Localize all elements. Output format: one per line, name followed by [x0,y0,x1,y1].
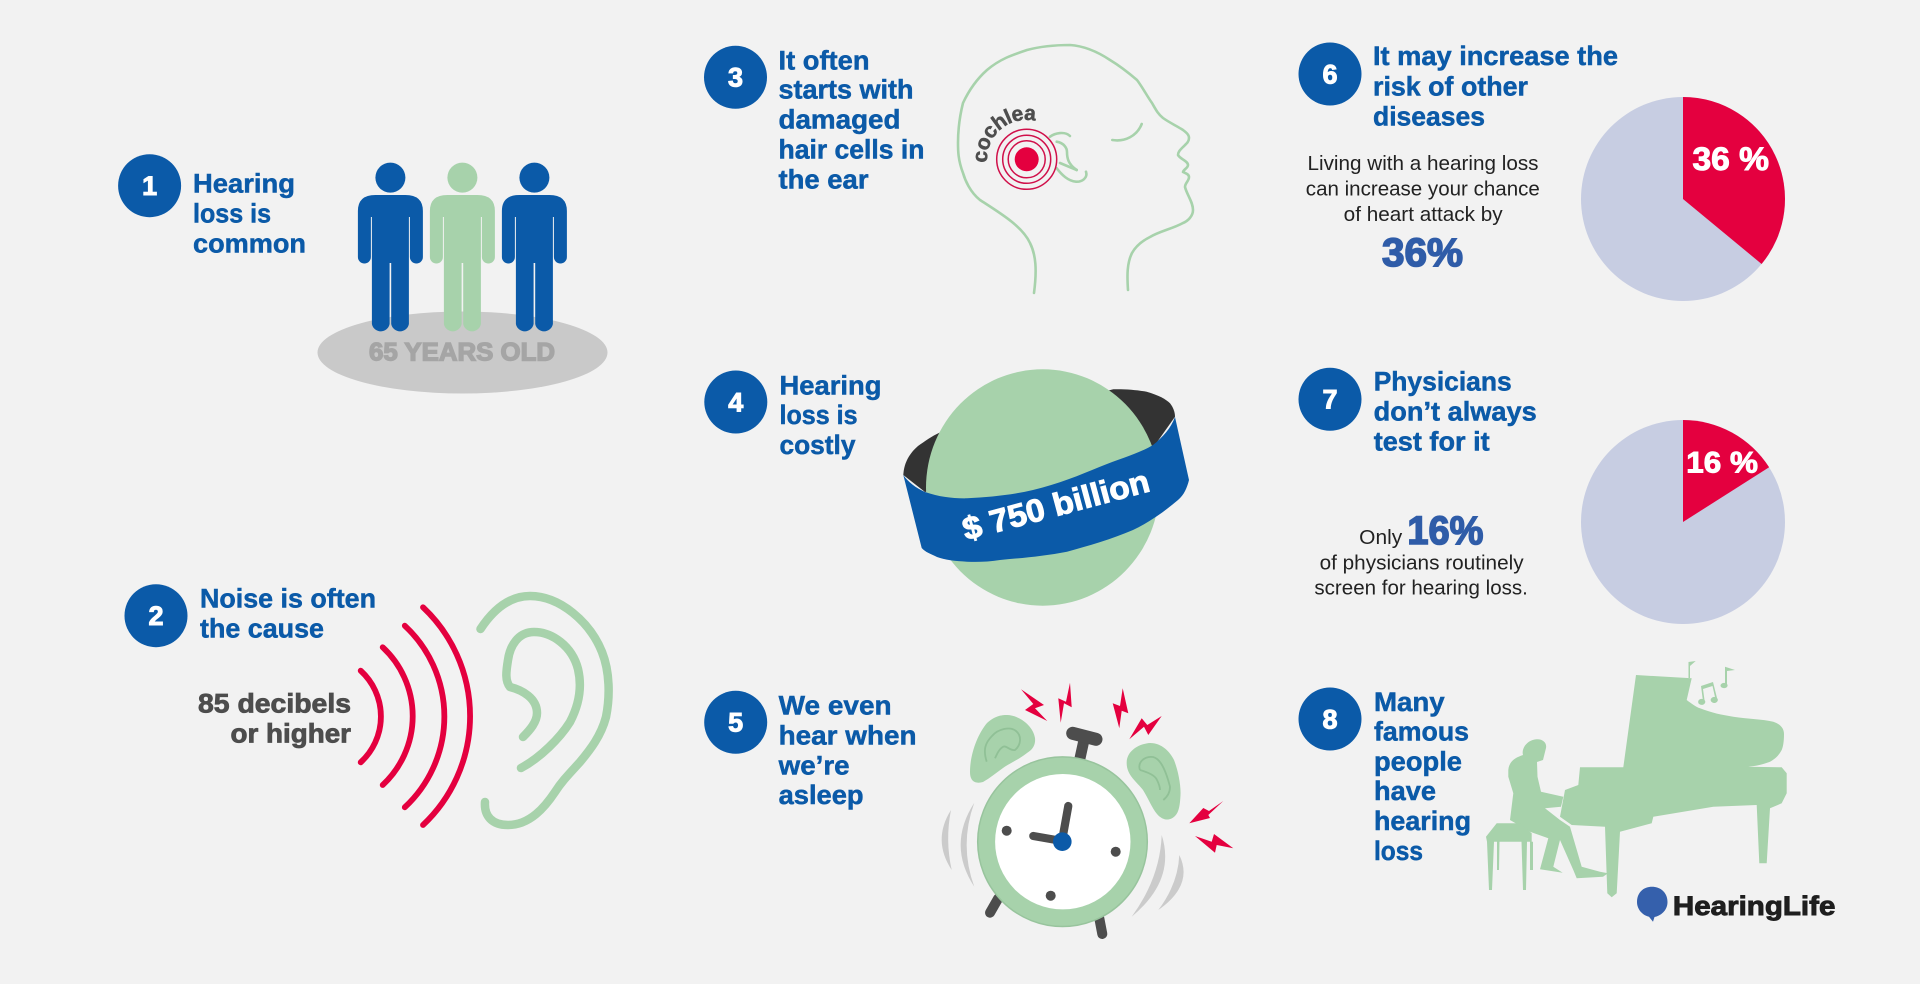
panel: 3 damaged hair cells [704,44,1194,294]
body text 6: Living with a hearing loss [1308,152,1538,175]
heading 4: loss is [780,400,858,430]
number badge 1: 1 [142,171,157,201]
bell ear left [970,715,1035,783]
heading 1: loss is [193,198,271,228]
body text 7 [1314,509,1528,599]
number badge 1 [118,154,181,217]
number badge 3: 3 [728,63,743,93]
heading 5: we’re [778,750,850,780]
heading 2 [200,583,376,644]
body text 7: 16% [1407,509,1483,553]
body text 6 [1306,152,1540,226]
heading 1 [193,168,306,258]
heading 3: damaged [778,104,900,134]
heading 7: Physicians [1374,367,1512,397]
icon: grand piano with pianist [1486,661,1787,897]
body text 7: Only [1359,526,1403,549]
number badge 4: 4 [728,387,743,417]
heading 6 [1373,41,1618,131]
pie chart: 16 percent: 16 % [1686,447,1758,480]
icon: blue person right [502,163,567,331]
icon: green globe [926,369,1159,606]
label: 65 years old: 65 YEARS OLD [369,339,555,367]
heading 8: have [1374,776,1436,806]
music notes [1688,661,1735,705]
heading 7: don’t always [1374,397,1537,427]
heading 3 [778,45,924,194]
label: cochlea: cochlea [976,108,1036,162]
heading 3: hair cells in [778,134,924,164]
heading 5: asleep [779,780,864,810]
panel: 6 risk of other diseases [1298,41,1785,301]
number badge 5: 5 [728,708,743,738]
number badge 7: 7 [1322,385,1338,415]
pie chart: 16 percent [1581,420,1785,624]
icon: ear outline [480,596,609,825]
heading 2: the cause [200,614,324,644]
icon: cochlea target [997,129,1057,189]
heading 8 [1374,687,1471,866]
bell ear right [1127,743,1181,820]
icon: blue band front [903,417,1189,562]
heading 4 [780,370,882,460]
piano [1560,675,1787,897]
clock feet and top handle [990,733,1102,934]
heading 8: loss [1374,836,1423,866]
number badge 5 [704,691,767,754]
number badge 2: 2 [148,601,164,631]
heading 8: Many [1374,687,1445,717]
heading 2: Noise is often [200,583,376,613]
clock hands [1033,806,1068,841]
heading 8: hearing [1374,806,1471,836]
heading 8: people [1374,747,1462,777]
heading 5: We even [779,690,892,720]
logo: HearingLife [1637,887,1835,922]
number badge 3 [704,46,767,109]
body text 7: screen for hearing loss. [1314,576,1528,599]
icon: alarm clock [942,683,1233,934]
clock hub [1053,832,1072,851]
heading 5: hear when [779,720,917,750]
clock ring and face [978,757,1147,926]
body text 6: can increase your chance [1306,178,1540,201]
label: $ 750 billion: $ 750 billion [958,463,1153,547]
panel: 8 famous people [1298,661,1835,922]
number badge 4 [704,370,767,434]
grey ellipse with age label [318,312,608,394]
clock hour dots [1002,826,1121,901]
text: 85 decibels or higher: 85 decibels [198,689,351,719]
panel: 7 physicians don't always test [1298,367,1785,624]
heading 1: common [193,228,306,258]
heading 3: the ear [778,164,869,194]
piano bench [1486,823,1533,890]
number badge 8 [1298,688,1362,750]
heading 6: diseases [1373,101,1485,131]
pie chart: 36 percent: 36 % [1692,141,1769,177]
body text 6: of heart attack by [1344,203,1503,226]
panel: 4 hearing loss is costly [704,369,1189,606]
heading 3: It often [778,45,870,75]
panel: 5 we even hear when asleep [704,683,1233,934]
heading 8: famous [1374,717,1469,747]
number badge 7 [1298,368,1362,431]
heading 6: risk of other [1373,71,1528,101]
logo: HearingLife: HearingLife [1673,891,1835,921]
number badge 2 [124,584,188,647]
panel: 1 hearing loss is common [118,154,608,394]
heading 1: Hearing [193,168,295,198]
number badge 8: 8 [1322,704,1338,734]
heading 4: costly [780,430,856,460]
text: 85 decibels or higher: or higher [230,718,351,748]
heading 7: test for it [1374,427,1490,457]
heading 7 [1374,367,1537,457]
text: 85 decibels or higher [198,689,351,748]
motion lines [942,803,1184,917]
heading 6: It may increase the [1373,41,1618,71]
heading 3: starts with [778,75,914,105]
heading 4: Hearing [780,370,882,400]
icon: red sound waves [361,607,470,825]
icon: green person middle [430,163,495,331]
icon: head profile [958,45,1193,293]
red alarm bolts [1021,683,1233,853]
stat: 36%: 36% [1382,231,1463,275]
panel: 2 noise is often the cause [124,583,609,825]
pie chart: 36 percent [1581,97,1785,301]
icon: band back side [903,389,1175,492]
body text 7: of physicians routinely [1320,551,1524,574]
number badge 6 [1298,42,1362,106]
heading 5 [778,690,917,810]
icon: blue person left [358,163,423,331]
pianist [1508,739,1608,878]
number badge 6: 6 [1322,59,1338,89]
